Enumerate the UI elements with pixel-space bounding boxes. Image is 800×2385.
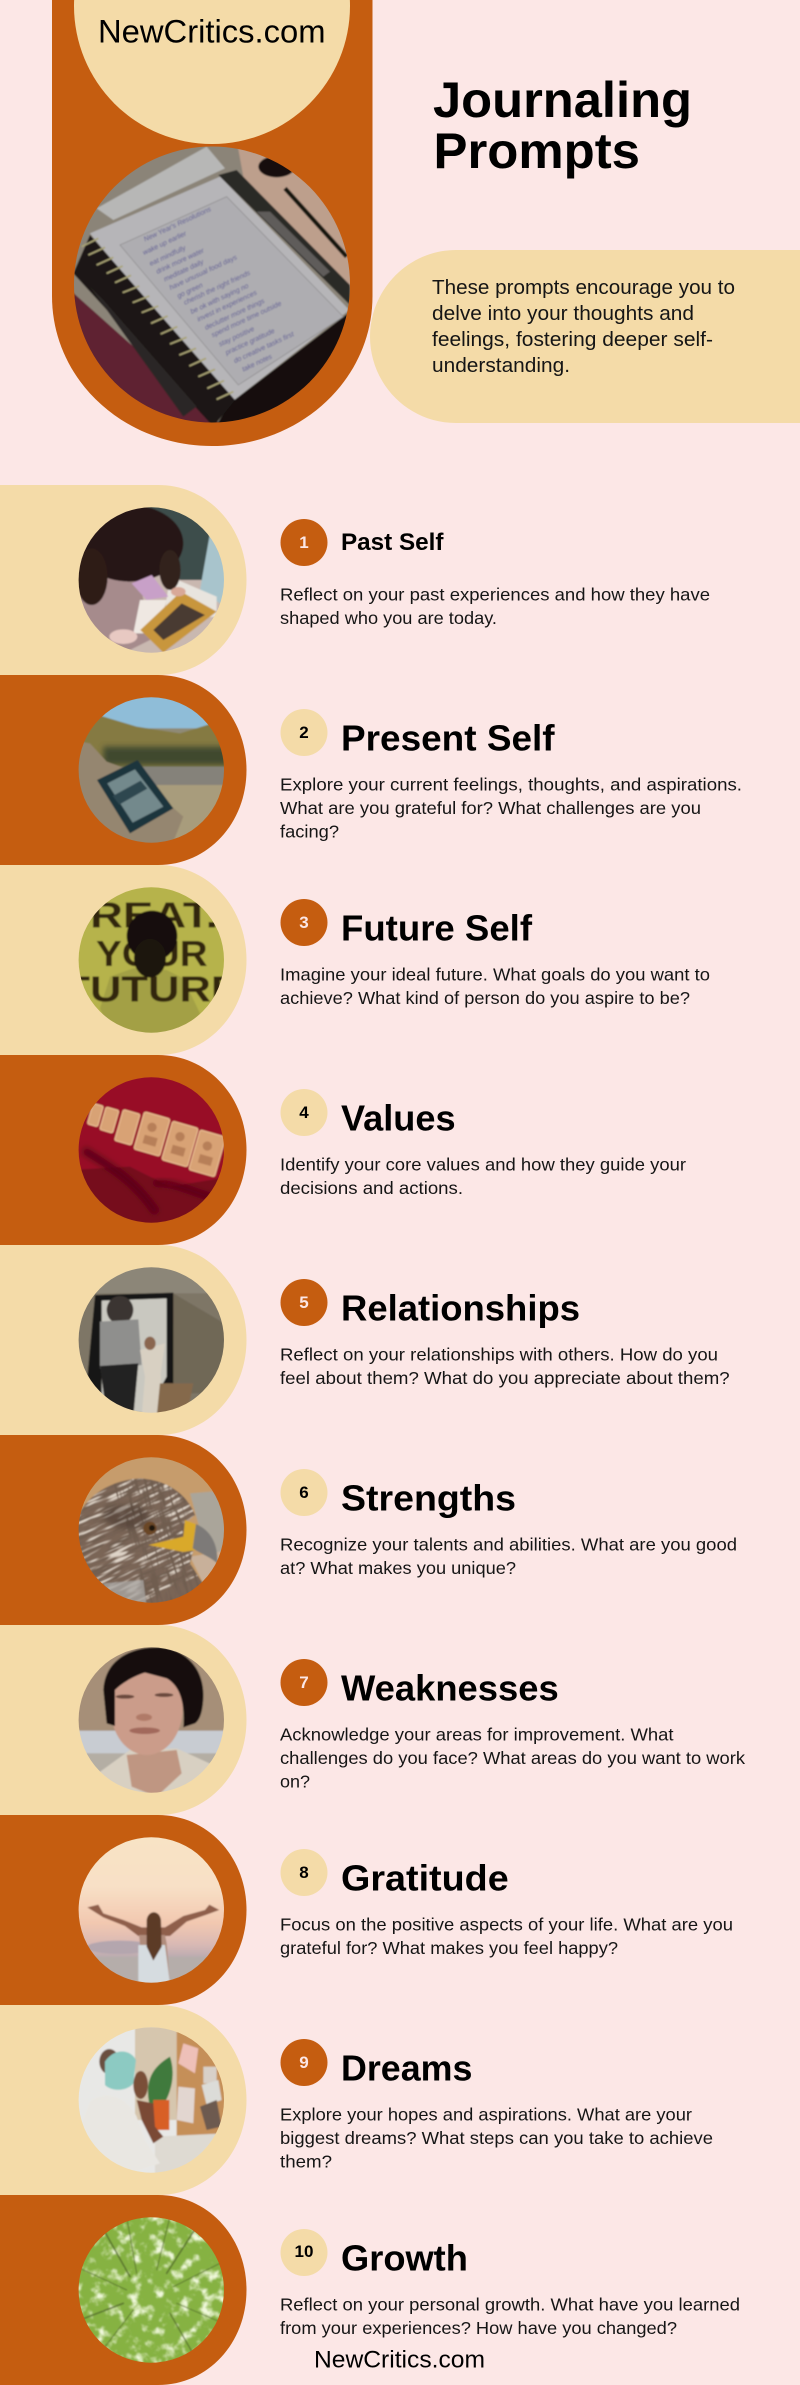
description: at? What makes you unique? (280, 1558, 516, 1578)
description: from your experiences? How have you changed? (280, 2318, 677, 2338)
number badge 4: 4 (299, 1103, 309, 1122)
description: facing? (280, 821, 339, 841)
photo: couple reflected in mirror (78, 1267, 224, 1413)
photo: card on rock by a lake (78, 697, 224, 843)
panel: intro callout (370, 250, 800, 423)
row band (0, 1625, 246, 1815)
photo: spiral notebook: do creative tasks first (233, 331, 296, 365)
number badge 8: 8 (299, 1863, 309, 1882)
photo: person before letter wall: TUTURE (63, 969, 240, 1010)
description: biggest dreams? What steps can you take to achieve (280, 2128, 713, 2148)
photo: eagle head (78, 1457, 224, 1603)
panel: prompt 10 Growth (0, 2195, 740, 2385)
photo: spiral notebook: stay positive (218, 326, 256, 348)
description (280, 1915, 733, 1958)
panel: prompt 2 Present Self (0, 675, 742, 865)
photo: spiral notebook: be ok with saying no (190, 283, 250, 316)
photo: person before letter wall (78, 887, 224, 1033)
panel: prompt 6 Strengths (0, 1435, 736, 1625)
photo: spiral notebook: declutter more things (204, 298, 266, 332)
description: Recognize your talents and abilities. What are you good (280, 1535, 737, 1555)
number badge 7 (280, 1659, 328, 1706)
number badge 8 (280, 1849, 328, 1896)
number badge 2: 2 (299, 723, 309, 742)
panel: prompt 8 Gratitude (0, 1815, 733, 2005)
title: Dreams (341, 2048, 472, 2089)
description: achieve? What kind of person do you aspire to be? (280, 988, 690, 1008)
panel: intro callout: These prompts encourage you to (432, 276, 735, 299)
panel: prompt 1 Past Self (0, 485, 710, 675)
description: What are you grateful for? What challenges are you (280, 798, 701, 818)
description: Explore your current feelings, thoughts, and aspirations. (280, 775, 742, 795)
photo: gold bars on red silk (78, 1077, 224, 1223)
description: decisions and actions. (280, 1178, 463, 1198)
description: Reflect on your relationships with others. How do you (280, 1345, 718, 1365)
panel: prompt 5 Relationships (0, 1245, 730, 1435)
description (280, 2295, 740, 2338)
number badge 4 (280, 1089, 328, 1136)
photo: spiral notebook: wake up earlier (142, 230, 188, 257)
number badge 3: 3 (299, 913, 309, 932)
photo: spiral notebook: eat mindfully (149, 245, 187, 268)
description: on? (280, 1771, 310, 1791)
number badge 5 (280, 1279, 328, 1326)
description (280, 775, 742, 841)
row band (0, 865, 246, 1055)
number badge 10 (280, 2229, 328, 2276)
number badge 1: 1 (299, 533, 309, 552)
footer: site name: NewCritics.com (314, 2347, 485, 2374)
row band (0, 485, 246, 675)
number badge 6: 6 (299, 1483, 309, 1502)
description: grateful for? What makes you feel happy? (280, 1938, 618, 1958)
photo: spiral notebook: invest in experiences (196, 289, 259, 323)
number badge 1 (280, 519, 328, 566)
row band (0, 2195, 246, 2385)
photo: woman with raised arms at sea (78, 1837, 224, 1983)
photo: person before letter wall: YOUR (96, 933, 208, 974)
photo: spiral notebook: drink more water (155, 247, 206, 276)
photo: woman with picture frame (78, 507, 224, 653)
row band (0, 1055, 246, 1245)
title: Gratitude (341, 1858, 509, 1899)
row band (0, 2005, 246, 2195)
description (280, 1535, 737, 1578)
number badge 5: 5 (299, 1293, 309, 1312)
photo: spiral notebook: cherish the right friends (183, 270, 252, 307)
number badge 9 (280, 2039, 328, 2086)
photo: forest canopy (78, 2217, 224, 2363)
description (280, 2105, 713, 2171)
description: Imagine your ideal future. What goals do you want to (280, 965, 710, 985)
photo: crying woman (78, 1647, 224, 1793)
description (280, 585, 710, 628)
title: Present Self (341, 718, 556, 759)
description (280, 1155, 686, 1198)
heading: Journaling Prompts: Prompts (434, 123, 640, 179)
title: Future Self (341, 908, 533, 949)
title: Values (341, 1098, 456, 1139)
title: Strengths (341, 1478, 516, 1519)
description: feel about them? What do you appreciate about them? (280, 1368, 730, 1388)
title: Relationships (341, 1288, 580, 1329)
logo circle (74, 0, 350, 144)
photo: person before letter wall: REAT. (90, 895, 218, 936)
number badge 6 (280, 1469, 328, 1516)
panel: header pill (52, 0, 372, 446)
title: Growth (341, 2238, 468, 2279)
photo: spiral notebook: meditate daily (163, 259, 205, 283)
description (280, 1345, 730, 1388)
description (280, 1725, 745, 1791)
panel: prompt 3 Future Self (0, 865, 710, 1055)
number badge 7: 7 (299, 1673, 309, 1692)
panel: intro callout: understanding. (432, 354, 570, 377)
panel: prompt 9 Dreams (0, 2005, 713, 2195)
description: challenges do you face? What areas do you want to work (280, 1748, 745, 1768)
heading: Journaling Prompts (433, 72, 692, 179)
description: Identify your core values and how they guide your (280, 1155, 686, 1175)
row band (0, 1815, 246, 2005)
panel: intro callout: delve into your thoughts and (432, 302, 694, 325)
row band (0, 675, 246, 865)
photo: spiral notebook: take notes (241, 353, 274, 373)
panel: prompt 7 Weaknesses (0, 1625, 745, 1815)
photo: spiral notebook (70, 140, 360, 430)
row band (0, 1245, 246, 1435)
description: Focus on the positive aspects of your life. What are you (280, 1915, 733, 1935)
logo text: NewCritics.com (98, 14, 326, 50)
orange pill background (52, 0, 372, 446)
description: Reflect on your personal growth. What have you learned (280, 2295, 740, 2315)
photo: woman looking at vision board (78, 2027, 224, 2173)
photo: spiral notebook: go green (176, 282, 204, 300)
title: Weaknesses (341, 1668, 559, 1709)
description: Reflect on your past experiences and how they have (280, 585, 710, 605)
description: them? (280, 2151, 332, 2171)
description: Acknowledge your areas for improvement. What (280, 1725, 674, 1745)
number badge 10: 10 (295, 2242, 313, 2261)
photo: spiral notebook: New Year's Resolutions (143, 206, 213, 243)
number badge 9: 9 (299, 2053, 309, 2072)
photo: spiral notebook: practice gratitude (224, 328, 276, 357)
row band (0, 1435, 246, 1625)
panel: intro callout: feelings, fostering deeper self- (432, 328, 713, 351)
description: Explore your hopes and aspirations. What are your (280, 2105, 692, 2125)
photo: spiral notebook: spend more time outside (211, 300, 283, 339)
number badge 2 (280, 709, 328, 756)
description (280, 965, 710, 1008)
description: shaped who you are today. (280, 608, 497, 628)
panel: prompt 4 Values (0, 1055, 686, 1245)
photo: spiral notebook: have unusual food days (169, 254, 239, 292)
title: Past Self (341, 529, 445, 556)
heading: Journaling Prompts: Journaling (433, 72, 692, 128)
number badge 3 (280, 899, 328, 946)
